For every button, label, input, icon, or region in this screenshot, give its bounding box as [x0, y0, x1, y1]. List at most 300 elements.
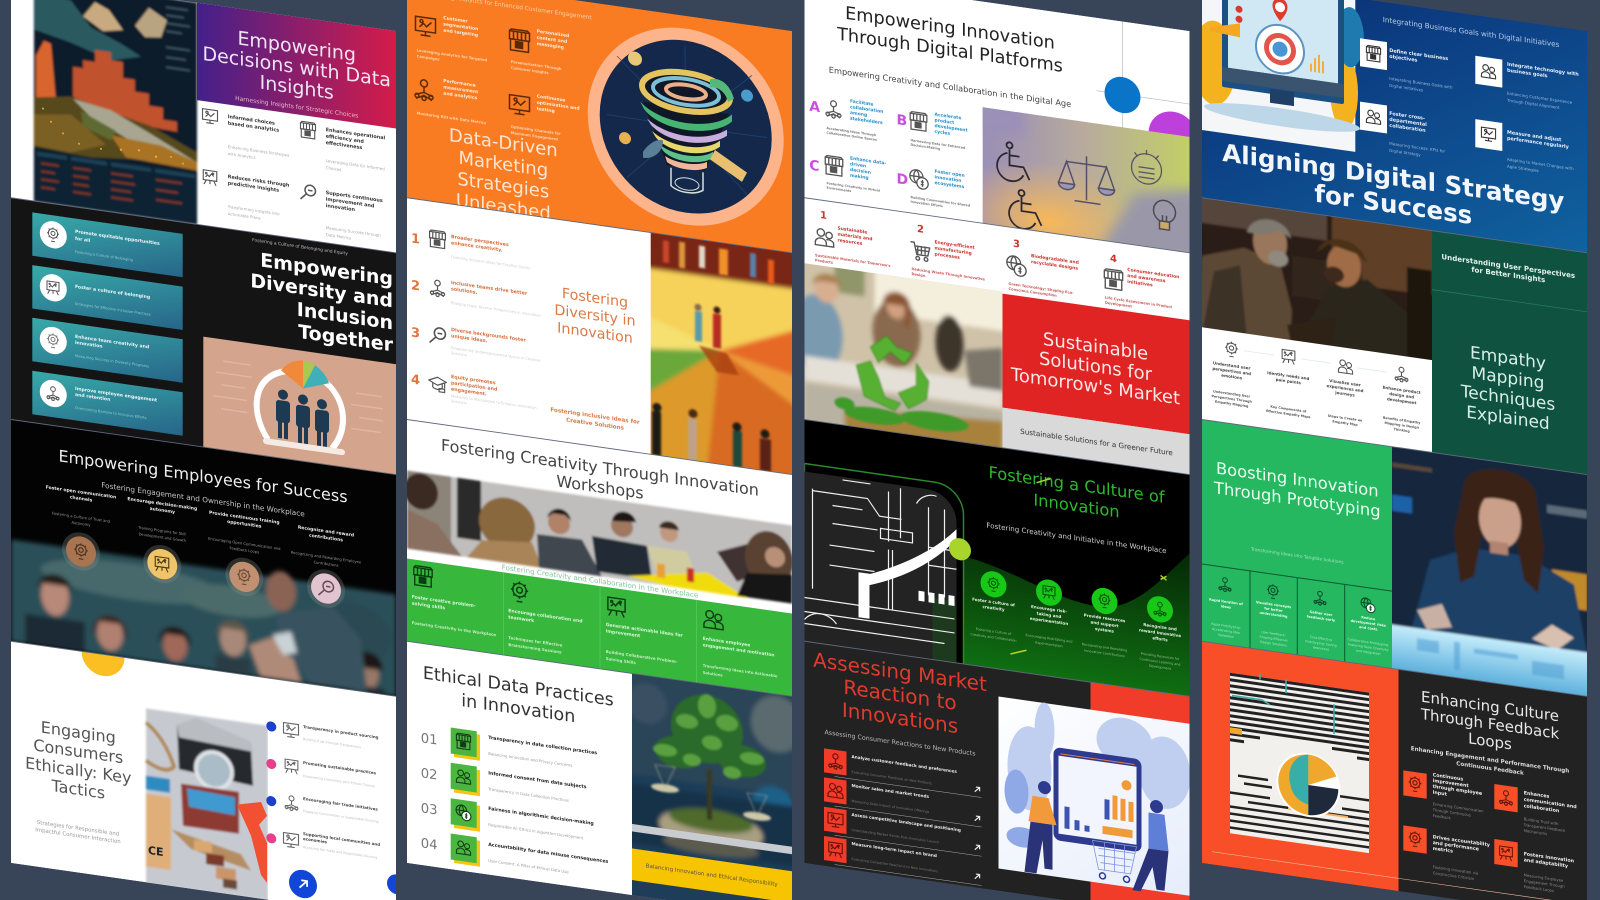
- item 1: improvement: [1433, 778, 1469, 789]
- item 3: Constructive Criticism: [1433, 870, 1475, 881]
- list item 3: innovation: [75, 340, 103, 350]
- feature 3: Green Technology: Shaping Eco-: [1008, 282, 1074, 295]
- step 3: Recognizing and Rewarding: [1082, 642, 1127, 653]
- item 1: Digital Initiatives: [1389, 83, 1423, 93]
- item C: Fostering Creativity in Virtual: [826, 181, 880, 193]
- step 3: systems: [1095, 626, 1115, 634]
- item 3: Foster cross-: [1389, 111, 1425, 122]
- item 2: [1494, 784, 1577, 841]
- step 4: Continuous Learning and: [1139, 657, 1181, 667]
- item 3: [1403, 825, 1491, 884]
- step 4: Contributions: [314, 560, 338, 568]
- column 2: teamwork: [508, 615, 535, 624]
- step 4: design and: [1389, 391, 1414, 400]
- feature 1: resources: [838, 237, 863, 247]
- list item 2: Foster a culture of belonging: [75, 284, 150, 301]
- step 1: Empathy Mapping: [1215, 400, 1249, 408]
- step 3: [1305, 589, 1337, 653]
- title: Diversity and: [250, 269, 393, 312]
- photo: camera and price tags: CE: [148, 844, 164, 859]
- panel: Enhancing Culture Through Feedback Loops: [1202, 641, 1587, 900]
- photo: workshop team: [404, 470, 793, 605]
- step 4: and Integration: [1356, 649, 1381, 656]
- item A: A: [809, 99, 820, 116]
- item D: Innovation Efforts: [910, 200, 943, 208]
- item 02: 02: [421, 766, 437, 784]
- item 4: Engagement Through: [1524, 878, 1565, 889]
- item 2: communication and: [1524, 797, 1577, 810]
- step 3: Encouraging Open Communication and: [208, 537, 281, 551]
- column 3: Generate actionable ideas for: [606, 622, 683, 639]
- accent marks: [1010, 473, 1166, 676]
- green wave: [964, 521, 1190, 697]
- column 1: Foster creative problem-: [412, 594, 476, 609]
- item 1: Feedback: [1433, 813, 1451, 821]
- step 2: Development and Growth: [139, 532, 187, 543]
- step 4: [1139, 593, 1181, 672]
- step 2: [127, 496, 197, 588]
- step 1: Understand user: [1213, 360, 1251, 371]
- step 2: Training Programs for Skill: [137, 526, 186, 537]
- column 2: Techniques for Effective: [508, 635, 563, 648]
- panel: Assessing Market Reaction to Innovations: [804, 641, 1190, 900]
- item 2: Integrate technology with: [1507, 62, 1579, 78]
- feature 2: Reducing Waste Through Innovative: [912, 267, 985, 282]
- photo: camera and price tags: [146, 708, 268, 900]
- illustration: team under dome: [203, 337, 396, 475]
- item 4: Sessions: [451, 399, 467, 405]
- step 2: Encourage decision-making: [127, 496, 197, 512]
- step 1: Accelerating Idea: [1212, 627, 1240, 635]
- title: Mapping: [1472, 363, 1544, 394]
- title: Techniques: [1460, 382, 1555, 415]
- list item 3: Measuring Success in Diversity Programs: [75, 354, 149, 368]
- title: Empowering: [260, 248, 393, 290]
- item 01: Transparency in data collection practices: [488, 735, 597, 756]
- subtitle: Harnessing Insights for Strategic Choices: [235, 95, 358, 120]
- column 1: [11, 0, 407, 900]
- column 1: Fostering Creativity in the Workplace: [412, 620, 496, 637]
- item 3: metrics: [1433, 846, 1453, 855]
- item: risks: [203, 170, 290, 225]
- step 2: [1256, 582, 1291, 648]
- green panel: [407, 558, 792, 697]
- step 4: Recognizing and Rewarding Employee: [291, 551, 362, 565]
- feature 2: processes: [934, 251, 960, 261]
- photo: two men talking: [1202, 198, 1432, 360]
- panel: Boosting Innovation Through Prototyping: [1202, 414, 1592, 703]
- item 1: Enhancing Communication: [1433, 801, 1484, 814]
- title: Innovation: [557, 320, 633, 347]
- list item 4: Improve employee engagement: [75, 386, 158, 404]
- arrow button: [289, 868, 317, 900]
- feature 3: recyclable designs: [1031, 259, 1078, 272]
- panel: Fostering Diversity in Innovation: [407, 188, 807, 485]
- photo: people on colour wheel: [637, 221, 807, 485]
- step 1: channels: [70, 494, 93, 504]
- title: Aligning Digital Strategy: [1222, 138, 1564, 216]
- item 03: Responsible AI: Ethics in Algorithm Development: [488, 822, 584, 841]
- item: improvement: [300, 184, 383, 245]
- step 3: Empathy Map: [1332, 419, 1358, 427]
- red title panel: [1002, 294, 1190, 434]
- step 1: Fostering a Culture of Trust and: [52, 511, 111, 524]
- tab item 2: [266, 758, 376, 788]
- column 3: Building Collaborative Problem-: [606, 649, 678, 664]
- item: improvement: innovation: [326, 203, 355, 213]
- panel: Empowering Decisions with Data Insights: [11, 0, 396, 253]
- title: Decisions with Data: [203, 42, 391, 92]
- tab item 4: Accessing Fair Trade and Responsible Sourcing: [303, 845, 377, 860]
- panel: Data-Driven Marketing Strategies: [407, 0, 792, 259]
- item A: stakeholders: [850, 116, 883, 126]
- subtitle: Understanding User Perspectives: [1441, 252, 1575, 280]
- photo: tree with scales: [622, 662, 803, 900]
- step 1: Creativity and Collaboration: [971, 632, 1016, 643]
- item B: Harnessing Data for Enhanced: [910, 138, 966, 150]
- step 1: ideas: [1221, 604, 1231, 610]
- item 1: [1403, 768, 1484, 825]
- item 1: Leveraging Analytics for Targeted: [417, 48, 487, 63]
- item 1: [416, 11, 487, 69]
- photo: woman at glowing table: [1392, 447, 1587, 696]
- step 4: Mapping in Design: [1384, 421, 1420, 430]
- item 2: 2: [411, 278, 420, 295]
- title: Empowering: [237, 26, 356, 66]
- item 4: Continuous: [537, 94, 566, 104]
- column 4: engagement and motivation: [703, 642, 775, 659]
- step 4: Recognize and: [1143, 622, 1177, 632]
- item D: ecosystems: [934, 180, 964, 190]
- item 03: [421, 794, 594, 848]
- row 4: Evaluating Competitor Reactions to New Innovations: [852, 857, 938, 873]
- subtitle: Fostering Creativity and Collaboration in the Workplace: [502, 563, 698, 600]
- item A: Collaborative Online Spaces: [826, 131, 877, 142]
- row 3: Assess competitive landscape and positioning: [852, 812, 961, 833]
- row 1: Analyze customer feedback and preferences: [852, 754, 957, 774]
- feature 3: Biodegradable and: [1031, 253, 1079, 266]
- title: Unleashed: [456, 190, 551, 224]
- column 3: [790, 0, 1204, 900]
- item 1: [411, 227, 530, 270]
- step 4: Providing Resources for: [1141, 652, 1180, 661]
- row 1: [824, 748, 980, 795]
- item C: [809, 150, 886, 198]
- subtitle: Fostering a Culture of Belonging and Equity: [252, 237, 348, 257]
- tab item 4: [266, 832, 380, 860]
- item: risks: Reduces risks through: [228, 174, 290, 189]
- item 4: Agile Strategies: [1507, 164, 1539, 173]
- item C: decision: [850, 167, 871, 176]
- arrow button partial: [387, 874, 396, 894]
- tab item 2: Empowering Consumers with Ethical Choices: [303, 774, 375, 788]
- item 4: Fosters innovation: [1524, 851, 1575, 865]
- item C: driven: [850, 161, 866, 170]
- step 1: Validation: [1218, 633, 1234, 639]
- item: analytics: Enhancing Business Strategies: [228, 144, 289, 158]
- item 1: Continuous: [1433, 772, 1463, 783]
- item C: making: [850, 173, 869, 181]
- item 4: Adapting to Market Changes with: [1507, 157, 1574, 171]
- item: efficiency: Enhances operational: [326, 127, 386, 142]
- column 4: Enhance employee: [703, 636, 750, 649]
- item 03: Fairness in algorithmic decision-making: [488, 806, 594, 827]
- step 4: Reduce: [1361, 615, 1376, 621]
- step 1: Understanding User: [1213, 389, 1251, 399]
- step 3: opportunities: [227, 519, 262, 530]
- tab item 1: Building Trust Through Transparency: [303, 737, 361, 749]
- item B: product: [934, 117, 955, 126]
- step 2: understanding: [1260, 611, 1288, 619]
- title: Innovation: [1033, 490, 1120, 522]
- title: Workshops: [556, 471, 644, 503]
- title: Data-Driven: [449, 125, 558, 162]
- title: Empowering Employees for Success: [58, 446, 348, 507]
- tab item 1: Transparency in product sourcing: [303, 724, 379, 740]
- item 04: [421, 829, 609, 885]
- item B: Accelerate: [934, 112, 961, 121]
- subtitle: Fostering Creativity and Initiative in the Workplace: [986, 521, 1167, 555]
- tab item 1: [266, 721, 378, 749]
- item: analytics: with Analytics: [228, 151, 256, 160]
- step 3: Steps to Create an: [1328, 414, 1363, 423]
- item B: [896, 106, 968, 155]
- item 2: Enhances: [1524, 790, 1549, 800]
- item 04: Accountability for data misuse consequences: [488, 842, 609, 865]
- list item 4: Overcoming Barriers to Inclusive Efforts: [75, 406, 147, 420]
- list item 3: [32, 318, 183, 383]
- item B: Decision-Making: [910, 143, 941, 151]
- item: risks: Transforming Insights into: [227, 204, 280, 216]
- step 1: Fostering a Culture of: [976, 627, 1012, 636]
- feature 4: Development: [1105, 301, 1132, 309]
- panel: Fostering Creativity Through Innovation Workshops: [404, 419, 793, 697]
- item 3: collaboration: [1389, 123, 1426, 134]
- step 3: [1082, 585, 1127, 659]
- item 3: Diverse backgrounds foster: [451, 327, 526, 344]
- column 2: Encourage collaboration and: [508, 608, 582, 625]
- photo: recycling symbol in office: [790, 256, 1010, 457]
- title: Together: [298, 320, 394, 356]
- panel: Ethical Data Practices in Innovation: [407, 631, 803, 900]
- title: Empathy: [1470, 343, 1546, 374]
- item D: D: [896, 171, 908, 189]
- item 4: Equity promotes: [451, 374, 496, 386]
- title: Diversity in: [554, 302, 636, 330]
- subtitle: Integrating Business Goals with Digital Initiatives: [1383, 15, 1560, 49]
- item 2: Customer Insights: [511, 66, 549, 75]
- row 4: Measure long-term impact on brand: [852, 841, 937, 858]
- step 2: User Feedback:: [1261, 630, 1286, 637]
- tab item 4: economies: [303, 836, 328, 845]
- panel: Empowering Diversity and Inclusion Together: [11, 198, 396, 475]
- feature 2: manufacturing: [934, 245, 972, 257]
- step 2: Identify needs and: [1267, 370, 1310, 381]
- item 2: messaging: [537, 41, 564, 51]
- item 2: Inclusive teams drive better: [451, 280, 528, 297]
- step 4: [1348, 595, 1389, 657]
- item 3: and analytics: [443, 91, 477, 101]
- title: Loops: [1468, 729, 1512, 754]
- panel: Fostering a Culture of Innovation: [804, 420, 1190, 697]
- step 1: [46, 484, 116, 576]
- list item 2: Strategies for Effective Inclusion Practices: [75, 302, 151, 317]
- subtitle: Enhancing Engagement and Performance Through: [1411, 746, 1569, 775]
- title: Enhancing Culture: [1421, 688, 1559, 725]
- list column background: [268, 730, 270, 900]
- item 3: unique ideas.: [451, 333, 488, 344]
- title: Fostering a Culture of: [988, 463, 1166, 507]
- step 4: Fostering Team Creativity: [1348, 642, 1389, 652]
- item 2: Transparent Feedback: [1523, 822, 1566, 833]
- row 2: Measuring Sales Impact of Innovative Offerings: [852, 799, 930, 814]
- title: Tomorrow's Market: [1010, 364, 1180, 409]
- list item 4: [32, 371, 183, 436]
- item A: Accelerating Ideas Through: [826, 126, 877, 137]
- step 2: Shaping Effective: [1260, 635, 1287, 643]
- step 1: Autonomy: [72, 521, 91, 527]
- item 4: and adaptability: [1524, 857, 1569, 870]
- subtitle: Empowering Creativity and Collaboration in the Digital Age: [829, 65, 1071, 109]
- item 1: Define clear business: [1389, 48, 1448, 62]
- feature 3: Conscious Consumption: [1008, 287, 1057, 298]
- title: Fostering Creativity Through Innovation: [441, 435, 759, 500]
- list item 1: Promote equitable opportunities: [75, 229, 160, 247]
- step 4: Thinking: [1394, 427, 1410, 434]
- step 2: Visualize concepts: [1256, 600, 1291, 609]
- step 2: Key Components of: [1270, 405, 1307, 414]
- item 1: Customer: [443, 15, 468, 25]
- feature 2: Design: [912, 272, 926, 278]
- photo: data landscape: [34, 0, 197, 225]
- item 2: Bridging Gaps: Diverse Perspectives in Innovation: [451, 301, 541, 318]
- item 4: 4: [411, 372, 420, 389]
- step 1: [971, 568, 1016, 643]
- item 3: [415, 74, 487, 125]
- accent circles: [1104, 74, 1198, 165]
- row 3: Understanding Market Trends Post-Innovation Launch: [852, 828, 939, 844]
- step 3: Provide continuous training: [209, 510, 280, 526]
- panel: Aligning Digital Strategy for Success: [1192, 0, 1587, 253]
- title: Insights: [260, 71, 334, 104]
- item: efficiency: effectiveness: [326, 140, 362, 151]
- item D: [896, 163, 971, 212]
- step 3: Feedback Loops: [230, 546, 259, 554]
- item A: Facilitate: [850, 99, 874, 108]
- item 4: [1475, 119, 1574, 178]
- title: Fostering: [562, 286, 628, 311]
- step 2: Effective Empathy Maps: [1266, 409, 1311, 419]
- caption: [1002, 408, 1190, 475]
- tab item 4: Supporting local communities and: [303, 831, 380, 847]
- chart image: pie with striped lines: [1230, 669, 1369, 853]
- column 4: Solutions: [703, 670, 723, 678]
- item 4: Measure and adjust: [1507, 130, 1562, 143]
- step 4: development risks: [1351, 619, 1386, 628]
- photo: tree with scales: Balancing Innovation and Ethical Responsibility: [646, 863, 778, 888]
- step 3: experiences and: [1327, 383, 1364, 393]
- item 2: Mechanisms: [1524, 828, 1547, 836]
- column 2: [508, 580, 582, 658]
- title: for Success: [1314, 179, 1472, 230]
- tab item 3: Engaging Communities in Sustainable Sourcing: [303, 809, 379, 824]
- step 1: emotions: [1221, 373, 1243, 381]
- item: analytics: Informed choices: [228, 114, 275, 127]
- feature 2: 2: [917, 224, 924, 236]
- item 01: Balancing Innovation and Privacy Concerns: [488, 751, 572, 768]
- column 2: Brainstorming Sessions: [508, 642, 562, 655]
- feature 4: Consumer education: [1127, 267, 1179, 280]
- illustration: shopping analytics: [998, 696, 1190, 898]
- step 1: Rapid Prototyping:: [1211, 622, 1241, 630]
- item 4: Optimizing Channels for: [511, 125, 561, 136]
- item: risks: Actionable Plans: [228, 211, 261, 221]
- title: Inclusion: [297, 298, 393, 334]
- item 03: 03: [421, 801, 437, 819]
- row 2: Monitor sales and market trends: [852, 783, 929, 799]
- accent dot: [949, 537, 971, 562]
- item 3: Empowering Underrepresented Voices in Creative: [451, 346, 541, 363]
- item 3: departmental: [1389, 117, 1427, 128]
- step 1: perspectives and: [1212, 366, 1251, 376]
- item 3: measurement: [443, 84, 479, 96]
- subtitle: for Better Insights: [1471, 265, 1545, 284]
- feature 1: Sustainable: [838, 225, 867, 236]
- item: improvement: Measuring Success through: [326, 225, 381, 238]
- item 01: 01: [421, 731, 437, 749]
- step 4: reward innovative: [1139, 627, 1181, 638]
- item: improvement: Data Metrics: [326, 232, 351, 241]
- title: Assessing Market: [813, 648, 987, 696]
- item 1: Integrating Business Goals with: [1389, 76, 1453, 90]
- feature 1: 1: [820, 210, 827, 222]
- item C: C: [809, 158, 819, 175]
- item: analytics: [202, 109, 289, 165]
- list item 3: Enhance team creativity and: [75, 334, 149, 350]
- item 1: Fostering Inclusive Ideas for Creative Teams: [451, 255, 530, 270]
- item 02: [421, 759, 587, 811]
- accent circle: [82, 652, 124, 676]
- step 2: taking and: [1037, 611, 1061, 619]
- item 1: through employee: [1433, 784, 1483, 797]
- feature 2: [910, 223, 985, 287]
- step 4: Benefits of Empathy: [1383, 416, 1421, 425]
- item: analytics: based on analytics: [228, 121, 279, 134]
- item 1: input: [1433, 790, 1448, 798]
- feature 2: Energy-efficient: [934, 239, 976, 251]
- subtitle: Creative Solutions: [566, 418, 625, 432]
- item 3: 3: [411, 325, 420, 342]
- feature 4: 4: [1110, 253, 1117, 265]
- panel: Sustainable Solutions for Tomorrow's Market: [790, 196, 1190, 483]
- item 4: participation and: [451, 380, 498, 393]
- title: in Innovation: [461, 691, 575, 727]
- item C: Enhance data-: [850, 156, 886, 167]
- step 4: development: [1387, 396, 1417, 405]
- title: Through Digital Platforms: [836, 24, 1063, 77]
- item D: Foster open: [934, 169, 965, 179]
- step 3: Cost-Effective: [1310, 635, 1332, 642]
- feature 4: Life Cycle Assessment in Product: [1105, 296, 1172, 309]
- step 3: Resources: [1313, 645, 1329, 652]
- step 3: feedback early: [1307, 615, 1336, 623]
- list item 1: for all: [75, 236, 91, 244]
- step 4: Development: [1149, 664, 1172, 671]
- illustration: funnel in circle: [588, 15, 784, 239]
- feature 3: [1007, 238, 1079, 301]
- title: Reaction to: [843, 675, 957, 715]
- step 1: Foster open communication: [46, 484, 116, 501]
